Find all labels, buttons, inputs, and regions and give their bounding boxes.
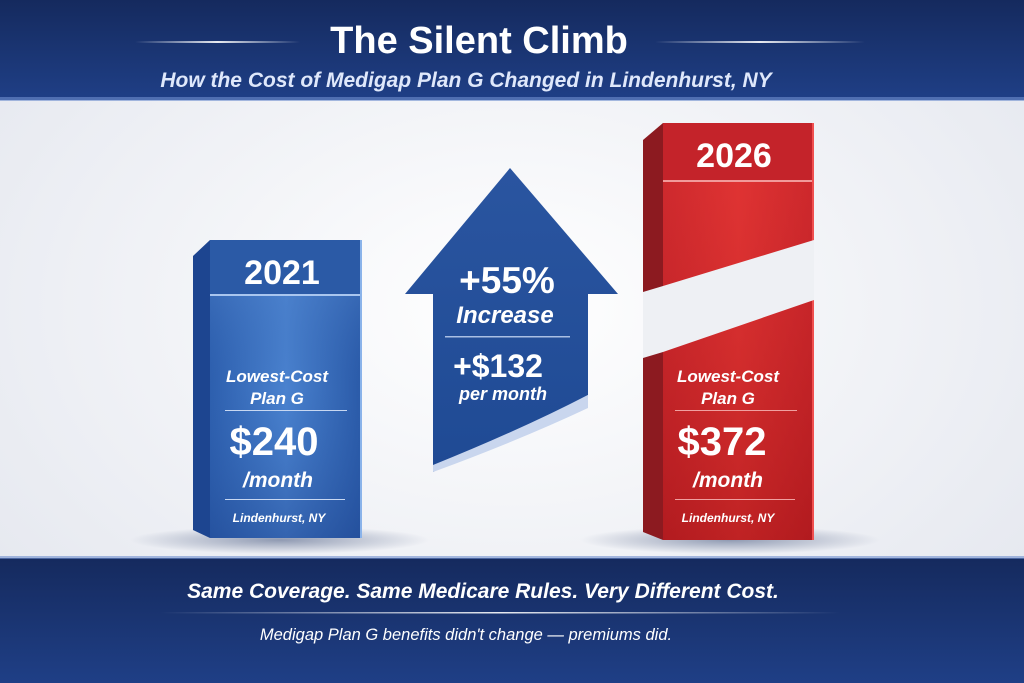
title: The Silent Climb [330,20,628,62]
tagline: Same Coverage. Same Medicare Rules. Very Different Cost. [187,580,779,603]
white stripe [643,240,814,358]
floor shadows [130,526,430,554]
price: $372 [678,420,766,464]
year 2026: 2026 [696,137,772,175]
footer band [0,556,1024,683]
subtitle: How the Cost of Medigap Plan G Changed in Lindenhurst, NY [160,69,774,92]
arrow: increase [405,168,618,472]
header band [0,0,1024,101]
year 2021: 2021 [244,254,320,292]
arrow: increase: per month [458,384,547,404]
label: Lowest-Cost [226,367,329,386]
bar: 2026: /month [692,469,763,492]
bar: 2021: /month [242,469,313,492]
stat: dollars: +$132 [453,348,543,384]
footnote: Medigap Plan G benefits didn't change — premiums did. [260,626,672,644]
bar: 2021: Lindenhurst, NY [233,511,326,525]
arrow: increase: Increase [456,302,554,329]
price: $240 [230,420,318,464]
stat: percent: +55% [459,260,555,301]
bar: 2026: Lindenhurst, NY [682,511,775,525]
label: Lowest-Cost [677,367,780,386]
bar: 2021: Plan G [250,389,304,408]
bar: 2026: Plan G [701,389,755,408]
bar: 2026 [643,123,814,540]
bar: 2021 [193,240,362,538]
